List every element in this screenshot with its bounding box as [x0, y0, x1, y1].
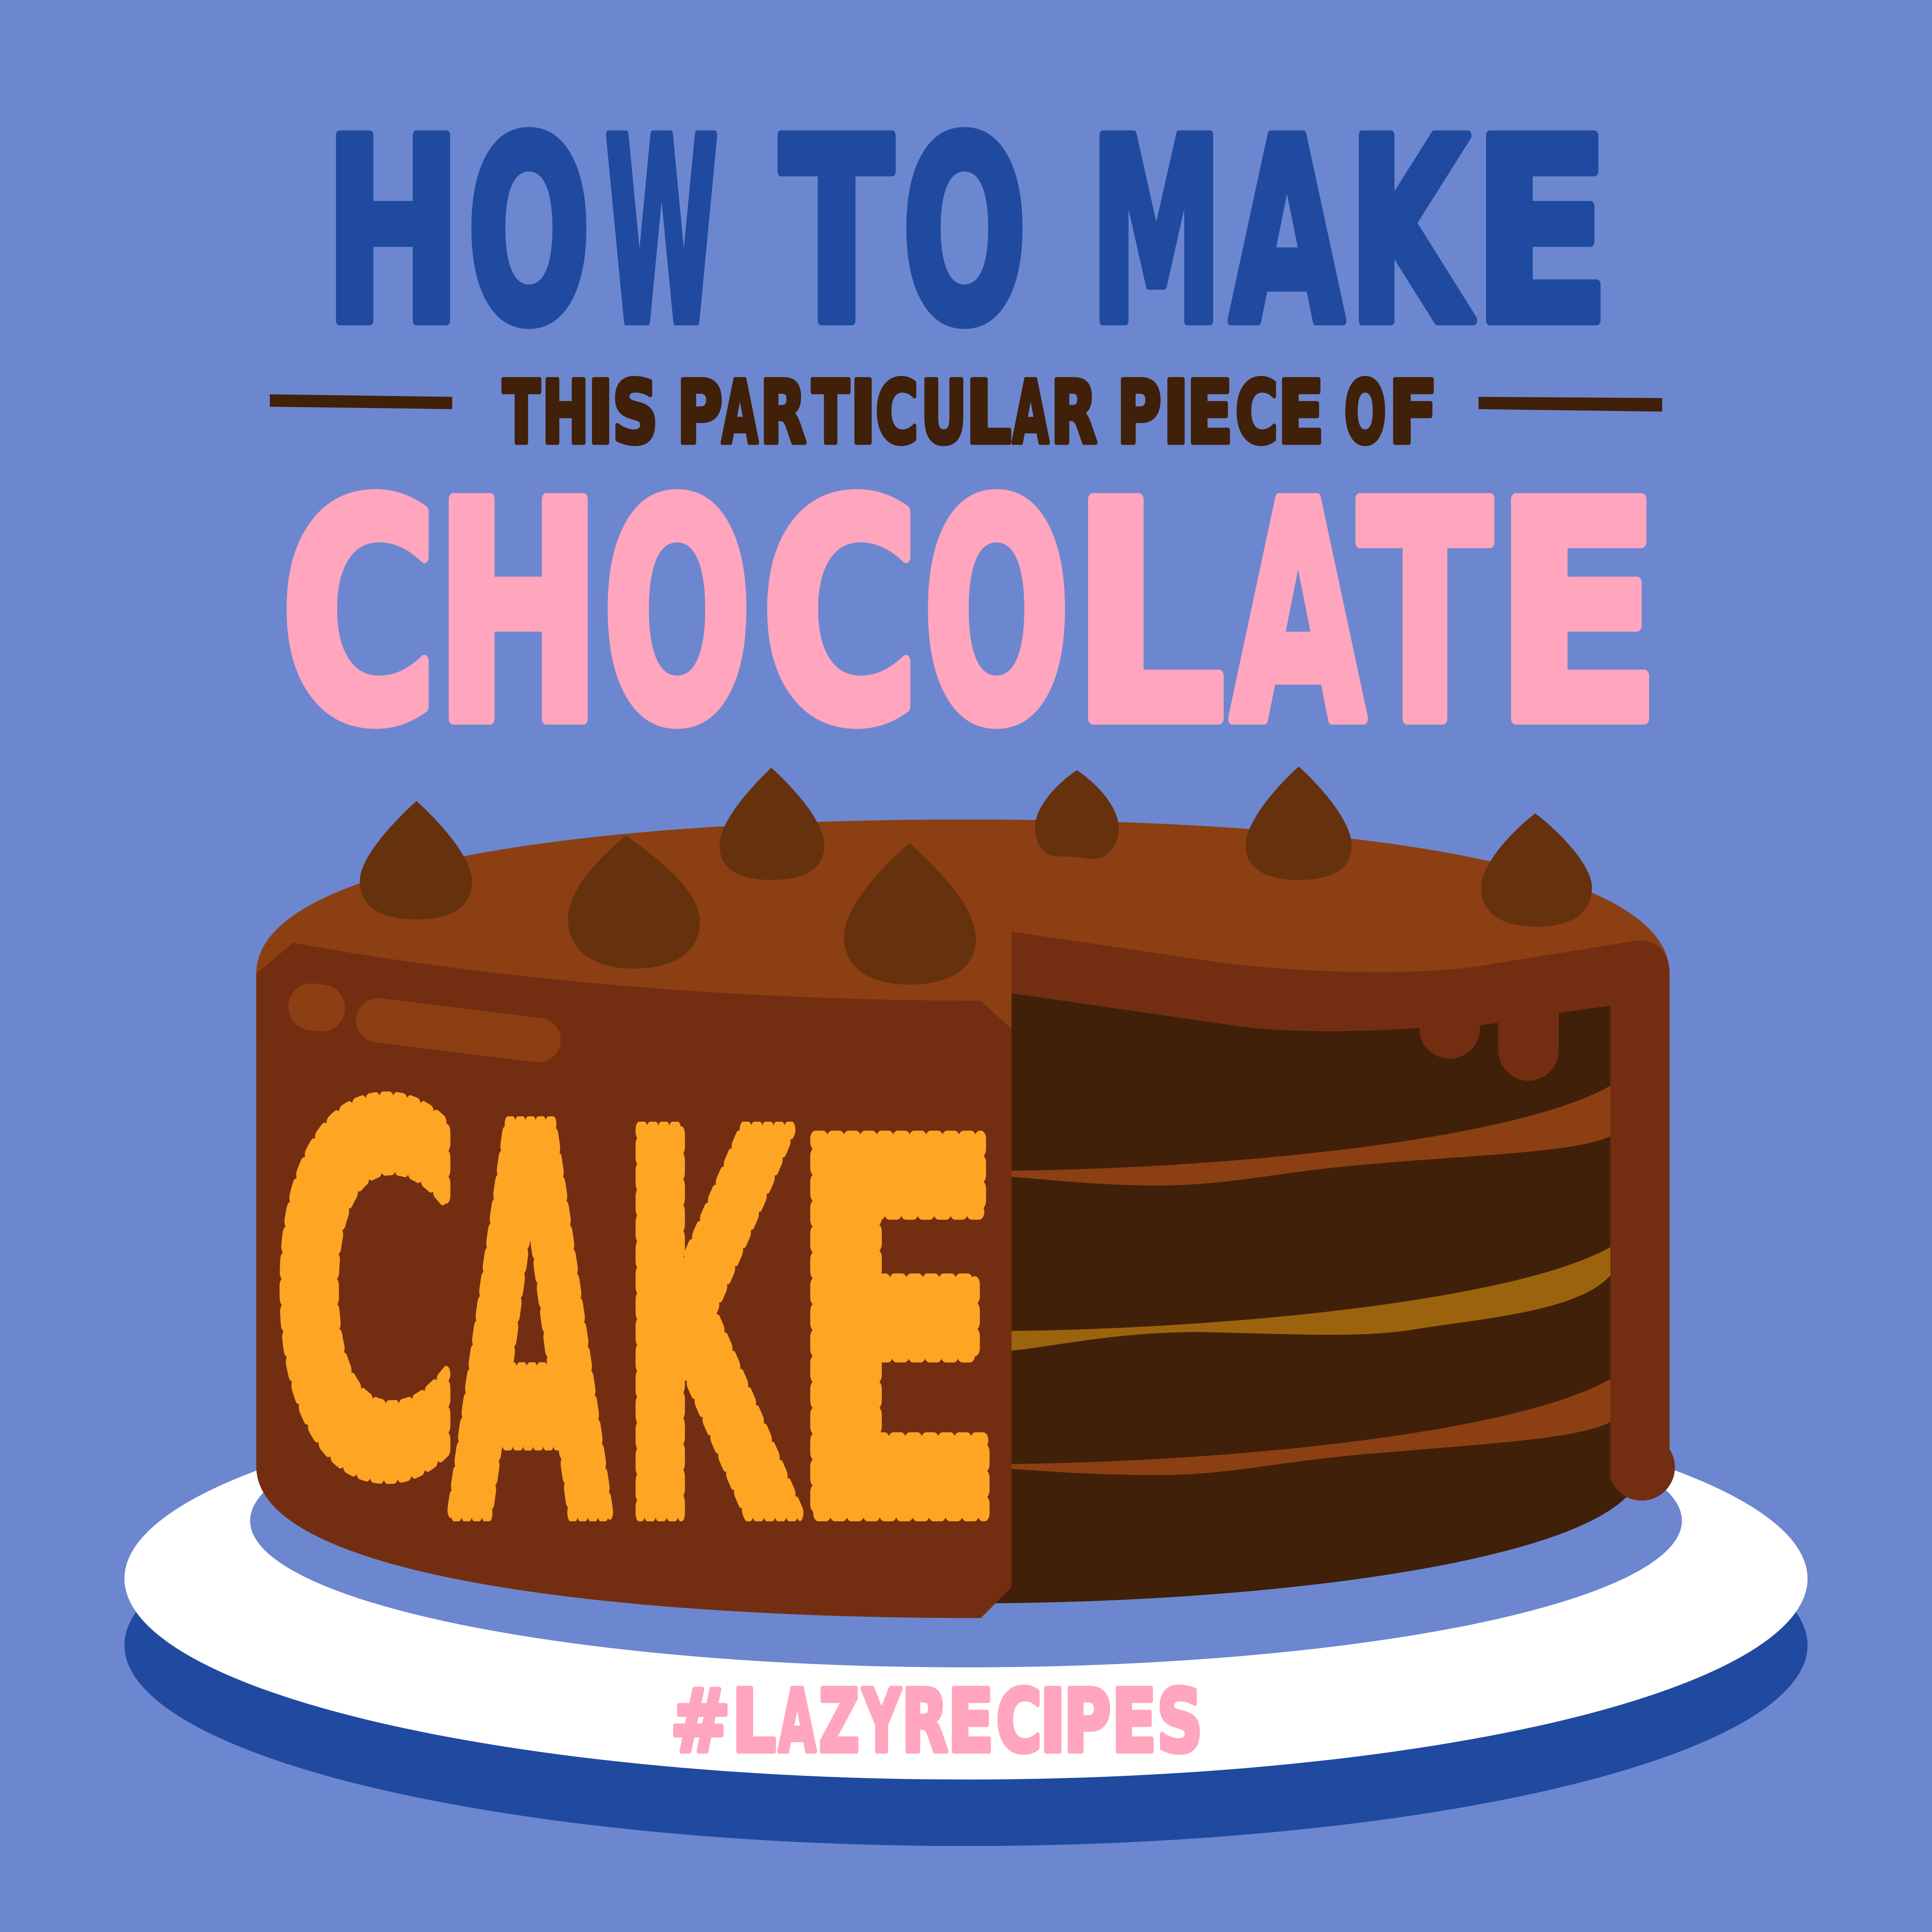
heading: how to make: T	[780, 85, 894, 380]
subheading with side rules: T	[503, 362, 540, 463]
subheading with side rules: H	[542, 362, 589, 463]
hashtag: lazy recipes: P	[1064, 1671, 1111, 1772]
hashtag: lazy recipes: C	[996, 1671, 1042, 1772]
cake top frosting	[256, 820, 1670, 1041]
subheading with side rules	[270, 362, 1662, 463]
highlight short	[312, 1007, 321, 1008]
filling layer one	[1012, 1086, 1611, 1185]
heading: how to make: W	[605, 85, 718, 380]
subheading with side rules: P	[677, 362, 723, 463]
plate	[124, 1374, 1808, 1846]
subheading with side rules: A	[722, 362, 758, 463]
frosting band and drips	[1012, 932, 1675, 1501]
heading: how to make: O	[902, 85, 1027, 380]
cake lettering: A	[449, 1018, 613, 1639]
heading: how to make: A	[1230, 85, 1345, 380]
hashtag: lazy recipes: A	[779, 1671, 816, 1772]
filling layer two	[1012, 1247, 1611, 1350]
hashtag: lazy recipes: I	[1040, 1671, 1066, 1772]
chocolate chip 3	[719, 768, 824, 880]
subheading with side rules: C	[1235, 362, 1278, 463]
cake front slice	[256, 943, 1012, 1618]
chocolate chip 2	[568, 835, 700, 969]
subheading with side rules: E	[1278, 362, 1324, 463]
cake lettering: E	[786, 1036, 1009, 1634]
hashtag: lazy recipes: Z	[819, 1671, 859, 1772]
heading: chocolate: A	[1231, 439, 1366, 789]
chocolate chip 1	[360, 801, 472, 919]
heading: how to make: K	[1347, 85, 1475, 380]
heading: chocolate: E	[1493, 439, 1662, 789]
heading: how to make: E	[1471, 85, 1612, 380]
hashtag: lazy recipes: L	[732, 1671, 776, 1772]
subheading with side rules: T	[812, 362, 849, 463]
subheading with side rules: R	[1051, 362, 1097, 463]
chocolate chip 7	[1481, 813, 1592, 927]
hashtag: lazy recipes: S	[1157, 1671, 1203, 1772]
cake lettering: C	[271, 1007, 463, 1587]
subheading with side rules: R	[760, 362, 806, 463]
heading: how to make: M	[1090, 85, 1223, 380]
chocolate chip 6	[1246, 767, 1352, 880]
heading: chocolate: O	[602, 439, 752, 789]
heading: chocolate: O	[923, 439, 1070, 789]
heading: how to make: O	[467, 85, 591, 380]
subheading with side rules: O	[1344, 362, 1386, 463]
heading: chocolate: T	[1359, 439, 1493, 789]
subheading with side rules: F	[1388, 362, 1438, 463]
filling layer three	[1012, 1379, 1611, 1475]
subheading with side rules: U	[921, 362, 967, 463]
highlight long	[378, 1020, 538, 1040]
heading: chocolate: H	[434, 439, 602, 789]
chocolate chip 4	[844, 843, 976, 985]
hashtag: lazy recipes: Y	[862, 1671, 901, 1772]
cake lettering: K	[618, 1025, 802, 1638]
hashtag: lazy recipes: R	[902, 1671, 948, 1772]
subheading with side rules: A	[1013, 362, 1049, 463]
cake	[256, 767, 1675, 1639]
subheading with side rules: E	[1187, 362, 1233, 463]
chocolate chip 5	[1035, 770, 1119, 859]
subheading with side rules: I	[1163, 362, 1189, 463]
cut interior sponge	[986, 986, 1641, 1603]
hashtag: lazy recipes: #	[670, 1671, 730, 1772]
heading: chocolate: C	[280, 439, 438, 789]
subheading with side rules: P	[1117, 362, 1161, 463]
subheading with side rules: S	[612, 362, 658, 463]
subheading with side rules: I	[587, 362, 614, 463]
subheading with side rules: L	[966, 362, 1011, 463]
hashtag: lazy recipes: E	[1112, 1671, 1156, 1772]
heading: chocolate: L	[1071, 439, 1225, 789]
heading: chocolate: C	[761, 439, 920, 789]
subheading with side rules: C	[876, 362, 918, 463]
subheading with side rules: I	[850, 362, 876, 463]
hashtag: lazy recipes: E	[947, 1671, 994, 1772]
heading: how to make: H	[324, 85, 462, 380]
